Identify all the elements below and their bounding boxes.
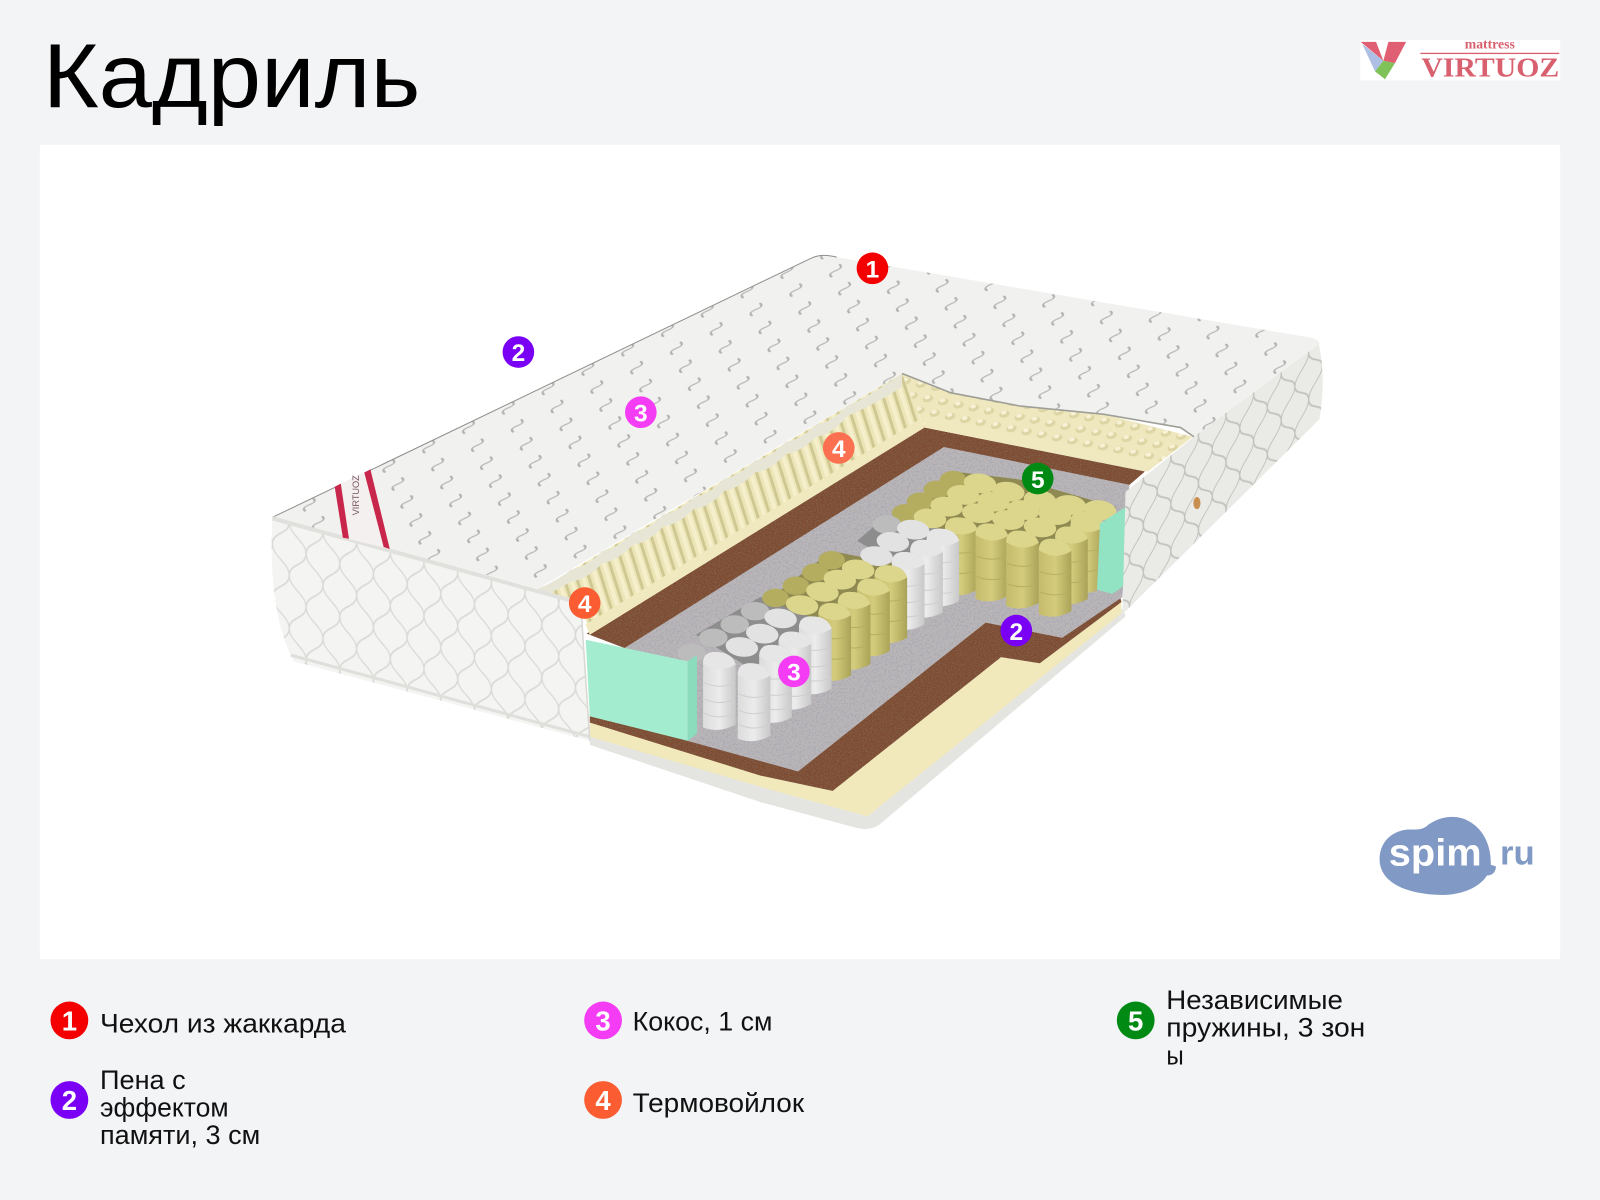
- marker 2: memory foam: 2: [512, 340, 525, 367]
- layer: felt: [624, 447, 1130, 771]
- marker 3: coconut lower: [778, 656, 810, 687]
- marker 3: coconut lower: 3: [787, 660, 801, 687]
- legend item 3: [584, 1002, 772, 1039]
- layer: upper coconut: [587, 428, 1145, 648]
- foam block: rear: [1097, 505, 1129, 594]
- fabric label: VIRTUOZ: [351, 475, 361, 515]
- spring tops: [678, 471, 1118, 662]
- side face: right: [1122, 342, 1323, 614]
- top surface: [272, 255, 1319, 589]
- marker 3: coconut: 3: [634, 400, 648, 427]
- marker 1: cover: 1: [866, 257, 879, 284]
- legend item 4: Термовойлок: [633, 1088, 805, 1118]
- marker 2: memory foam lower: 2: [1010, 619, 1023, 646]
- legend item 3: Кокос, 1 см: [633, 1007, 772, 1037]
- legend item 5: ы: [1166, 1040, 1184, 1070]
- legend item 1: Чехол из жаккарда: [100, 1009, 346, 1039]
- legend item 5: пружины, 3 зон: [1166, 1013, 1365, 1043]
- base strip: [590, 608, 1126, 829]
- legend item 5: [1117, 985, 1365, 1070]
- legend item 2: Пена с: [100, 1065, 186, 1095]
- legend item 1: [51, 1002, 346, 1039]
- foam block: front: [586, 640, 697, 741]
- side face: front: [272, 517, 590, 741]
- legend item 2: памяти, 3 см: [100, 1120, 260, 1150]
- marker 5: springs: 5: [1031, 467, 1045, 494]
- title: Кадриль: [43, 26, 420, 127]
- logo: Virtuoz: VIRTUOZ: [1421, 52, 1559, 83]
- cover edge at rear cut: [902, 373, 1194, 437]
- fabric label: [335, 469, 390, 549]
- logo: spim.ru: ru: [1500, 834, 1535, 872]
- layer: bottom foam: [590, 602, 1121, 816]
- spring block shadows: [696, 471, 1116, 668]
- upper foam rear base band: [924, 416, 1159, 471]
- panel: product image: [40, 145, 1560, 959]
- layer: upper foam, long side: [541, 373, 924, 635]
- legend item 5: 5: [1128, 1006, 1143, 1037]
- marker 1: cover: [857, 253, 888, 284]
- front piping: [272, 518, 581, 603]
- marker 2: memory foam lower: [1001, 615, 1032, 646]
- marker 3: coconut: [625, 396, 657, 428]
- marker 4: thermal felt front: [569, 587, 601, 619]
- legend item 2: 2: [62, 1085, 77, 1116]
- logo: Virtuoz: mattress: [1465, 36, 1515, 51]
- legend item 2: [51, 1065, 260, 1150]
- logo: Virtuoz: [1360, 36, 1560, 83]
- marker 4: thermal felt front: 4: [578, 591, 592, 618]
- marker 4: thermal felt: 4: [832, 436, 846, 463]
- marker 5: springs: [1022, 463, 1054, 494]
- legend item 4: [584, 1081, 805, 1119]
- layer: upper foam, back side: [902, 373, 1193, 471]
- legend item 1: 1: [62, 1006, 77, 1037]
- cover fold along cut: [538, 373, 902, 596]
- pocket springs: [703, 515, 1103, 741]
- legend item 2: эффектом: [100, 1092, 229, 1122]
- layer: bottom coconut: [590, 594, 1121, 791]
- upper foam base band: [586, 416, 924, 635]
- logo: spim.ru: spim: [1389, 831, 1482, 873]
- mattress illustration: [272, 255, 1323, 829]
- legend item 4: 4: [595, 1085, 611, 1116]
- legend item 5: Независимые: [1166, 985, 1343, 1015]
- legend item 3: 3: [595, 1006, 611, 1037]
- logo: spim.ru: [1380, 817, 1535, 895]
- marker 4: thermal felt: [823, 432, 855, 464]
- marker 2: memory foam: [503, 336, 534, 368]
